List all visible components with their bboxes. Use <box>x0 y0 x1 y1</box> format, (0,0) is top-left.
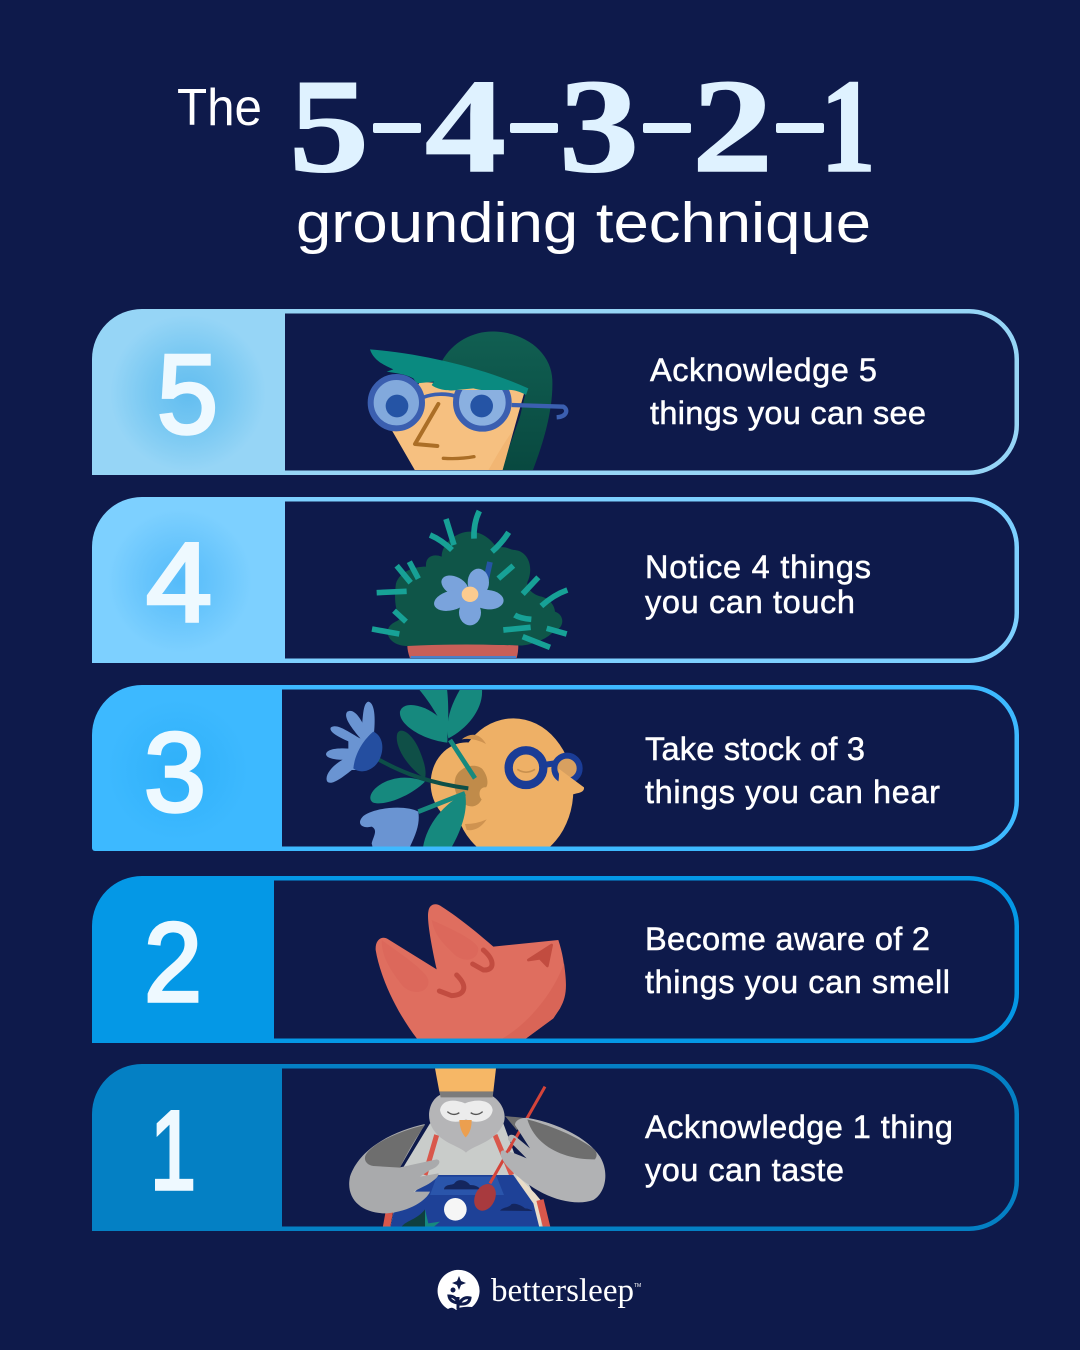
title numbers: 5-4-3-2-1 <box>289 52 876 200</box>
panel: step 2 smell <box>92 876 1017 1043</box>
text: taste: you can taste <box>645 1152 844 1188</box>
title numbers: 5-4-3-2-1: 5 <box>289 52 369 200</box>
illustration: head with flowers in ear <box>326 690 584 846</box>
text: hear: things you can hear <box>645 774 940 810</box>
frame <box>285 311 1017 473</box>
frame <box>282 1066 1017 1229</box>
text: touch: Notice 4 things <box>645 549 871 585</box>
number tab 3: 3 <box>144 710 206 835</box>
text: touch: you can touch <box>645 584 855 620</box>
trademark: TM <box>634 1283 641 1289</box>
text: smell: things you can smell <box>645 964 950 1000</box>
title subtitle: grounding technique <box>296 191 871 255</box>
text: taste: Acknowledge 1 thing <box>645 1109 953 1145</box>
frame <box>285 499 1017 661</box>
frame <box>282 687 1017 849</box>
text: see: Acknowledge 5 <box>650 352 877 388</box>
text: see: things you can see <box>650 395 926 431</box>
text: hear: Take stock of 3 <box>645 731 865 767</box>
illustration: flowering bush <box>372 511 567 660</box>
number tab 2 <box>92 876 274 1043</box>
panel: step 4 touch <box>92 497 1017 663</box>
title word: The: The <box>177 79 262 137</box>
panel: step 5 see <box>92 309 1017 475</box>
text: smell <box>645 921 950 1000</box>
illustration: red animal head <box>376 904 566 1042</box>
panel: step 1 taste <box>92 1064 1017 1231</box>
title <box>177 52 876 255</box>
text: hear <box>645 731 940 810</box>
text: touch <box>645 549 871 620</box>
logo: bettersleep <box>438 1270 641 1310</box>
title numbers: 5-4-3-2-1: 2 <box>692 52 773 200</box>
illustration: owl chef with spoon <box>349 1068 605 1230</box>
number tab 3 <box>92 685 282 851</box>
text: taste <box>645 1109 953 1188</box>
title numbers: 5-4-3-2-1: 3 <box>559 52 639 200</box>
title numbers: 5-4-3-2-1: 1 <box>820 52 876 200</box>
text: see <box>650 352 926 431</box>
text: smell: Become aware of 2 <box>645 921 930 957</box>
illustration: face with glasses <box>370 331 566 473</box>
number tab 1: 1 <box>150 1088 196 1213</box>
frame <box>274 878 1017 1041</box>
number tab 4: 4 <box>146 520 212 645</box>
icon: moon with sprout <box>438 1270 480 1310</box>
number tab 1 <box>92 1064 282 1231</box>
number tab 5 <box>92 309 285 475</box>
number tab 5: 5 <box>157 332 218 457</box>
number tab 2: 2 <box>144 900 202 1025</box>
wordmark: bettersleep <box>491 1273 634 1309</box>
number tab 4 <box>92 497 285 663</box>
title numbers: 5-4-3-2-1: 4 <box>425 52 506 200</box>
panel: step 3 hear <box>92 685 1017 862</box>
